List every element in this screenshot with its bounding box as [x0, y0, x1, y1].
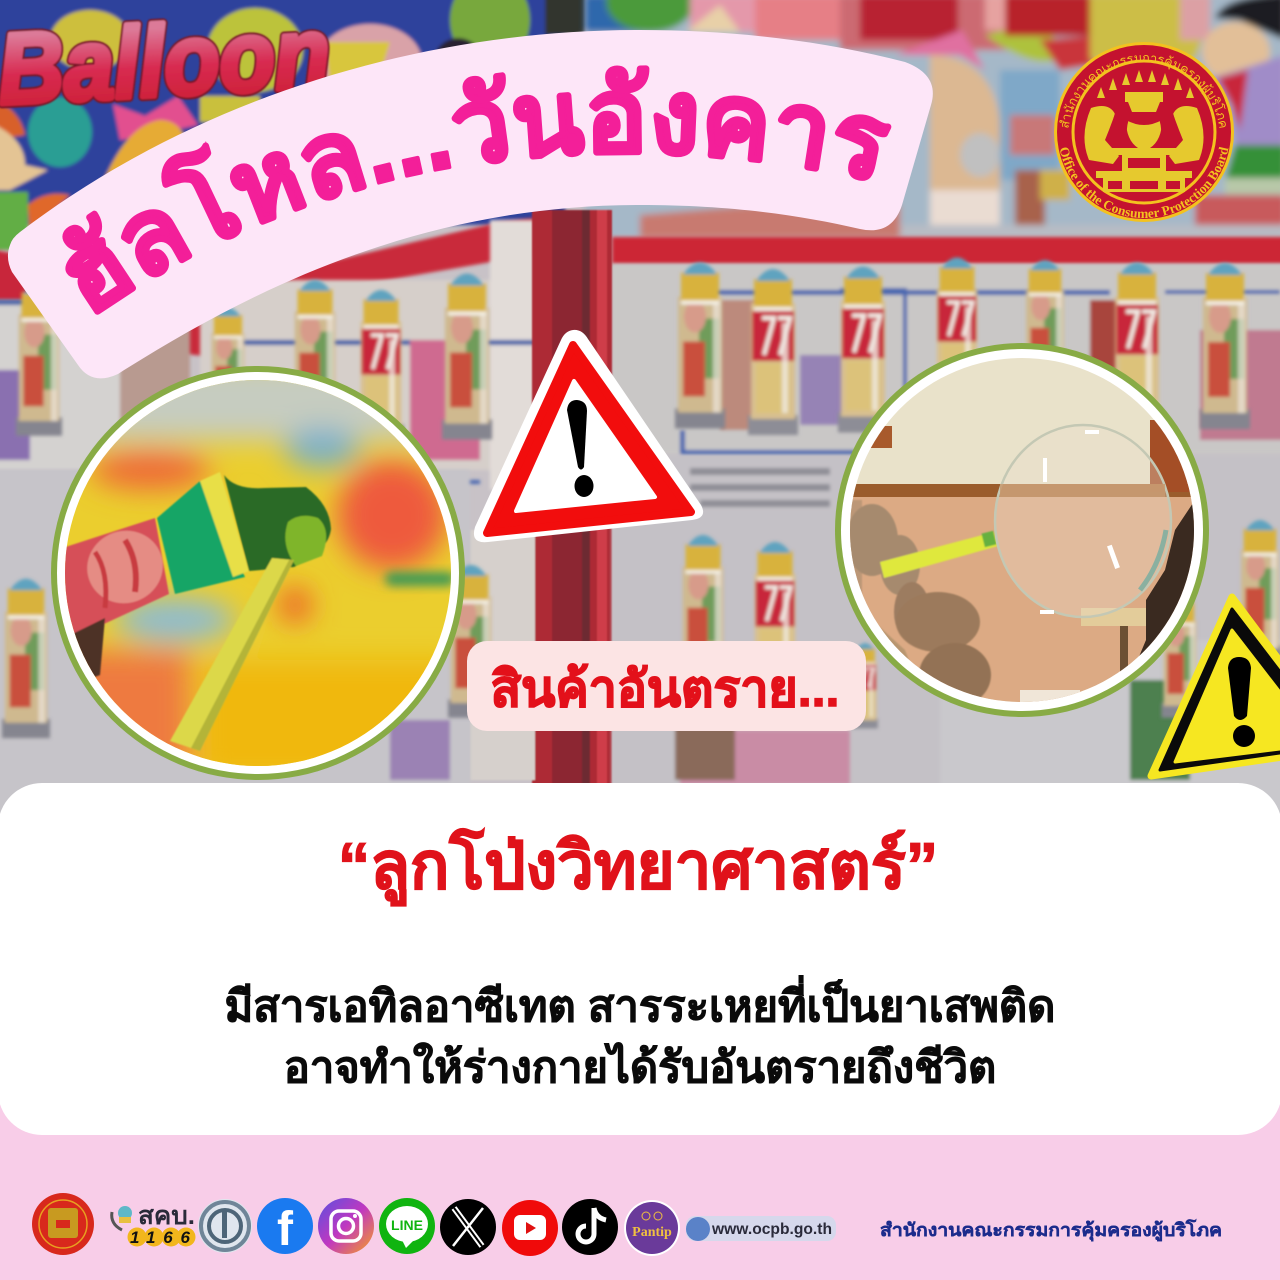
icon: line: LINE	[391, 1217, 423, 1233]
packaging art: upper right panel	[585, 0, 1280, 240]
icon: facebook: f	[277, 1203, 294, 1256]
label pill: dangerous product	[467, 641, 866, 731]
icon: ocpb logo	[198, 1199, 252, 1253]
packaging art: centre red seam	[470, 210, 612, 785]
photo circle: soap bubble on straw	[835, 343, 1209, 717]
website pill	[686, 1216, 836, 1241]
icon: x	[440, 1199, 496, 1255]
hotline 1166: สคบ.	[138, 1202, 195, 1230]
white information panel	[0, 783, 1280, 1135]
icon: seal small	[32, 1193, 94, 1255]
icon: tiktok	[562, 1199, 618, 1255]
banner shape	[8, 30, 933, 378]
icon: facebook	[257, 1198, 313, 1256]
warning body text: อาจทำให้ร่างกายได้รับอันตรายถึงชีวิต	[284, 1042, 996, 1092]
footer organisation name: สำนักงานคณะกรรมการคุ้มครองผู้บริโภค	[880, 1219, 1222, 1242]
hotline 1166	[112, 1202, 196, 1247]
footer band	[0, 1100, 1280, 1280]
tube row: left panel	[16, 274, 492, 443]
warning body text: มีสารเอทิลอาซีเทต สารระเหยที่เป็นยาเสพติด	[225, 975, 1055, 1031]
icon: red warning triangle	[474, 330, 703, 542]
background photo: balloon product packaging	[0, 0, 1280, 850]
pill text: สินค้าอันตราย...	[491, 661, 839, 717]
packaging art: upper left panel	[0, 0, 585, 250]
lower packaging card	[0, 452, 1192, 783]
warning body text	[225, 975, 1055, 1092]
photo circle: tube of balloon glue	[50, 360, 465, 780]
seal emblem	[1084, 70, 1204, 192]
website pill: www.ocpb.go.th	[711, 1221, 832, 1238]
icon: line	[379, 1198, 435, 1254]
packaging art: red header bands	[0, 215, 1280, 360]
packaging art: balloon logo lettering	[0, 18, 331, 110]
hotline 1166: 1166	[130, 1228, 191, 1247]
icon: instagram	[318, 1198, 374, 1254]
seal Thai text: สำนักงานคณะกรรมการคุ้มครองผู้บริโภค	[1059, 55, 1226, 128]
icon: pantip: Pantip	[632, 1225, 672, 1240]
tube row: right panel	[675, 257, 1250, 435]
icon: youtube	[502, 1200, 558, 1256]
footer contact row	[32, 1193, 1222, 1256]
seal English text: Office of the Consumer Protection Board	[1060, 146, 1228, 218]
tube row: lower	[2, 520, 1280, 738]
icon: pantip	[624, 1200, 680, 1256]
consumer protection seal	[1054, 42, 1234, 222]
banner title text: ฮัลโหล...วันอังคาร	[62, 65, 892, 315]
packaging art: striped card	[0, 220, 1280, 504]
tube body	[50, 472, 331, 751]
product name heading: “ลูกโป่งวิทยาศาสตร์”	[338, 827, 938, 907]
title banner	[8, 30, 933, 418]
icon: yellow warning triangle	[1151, 597, 1280, 776]
